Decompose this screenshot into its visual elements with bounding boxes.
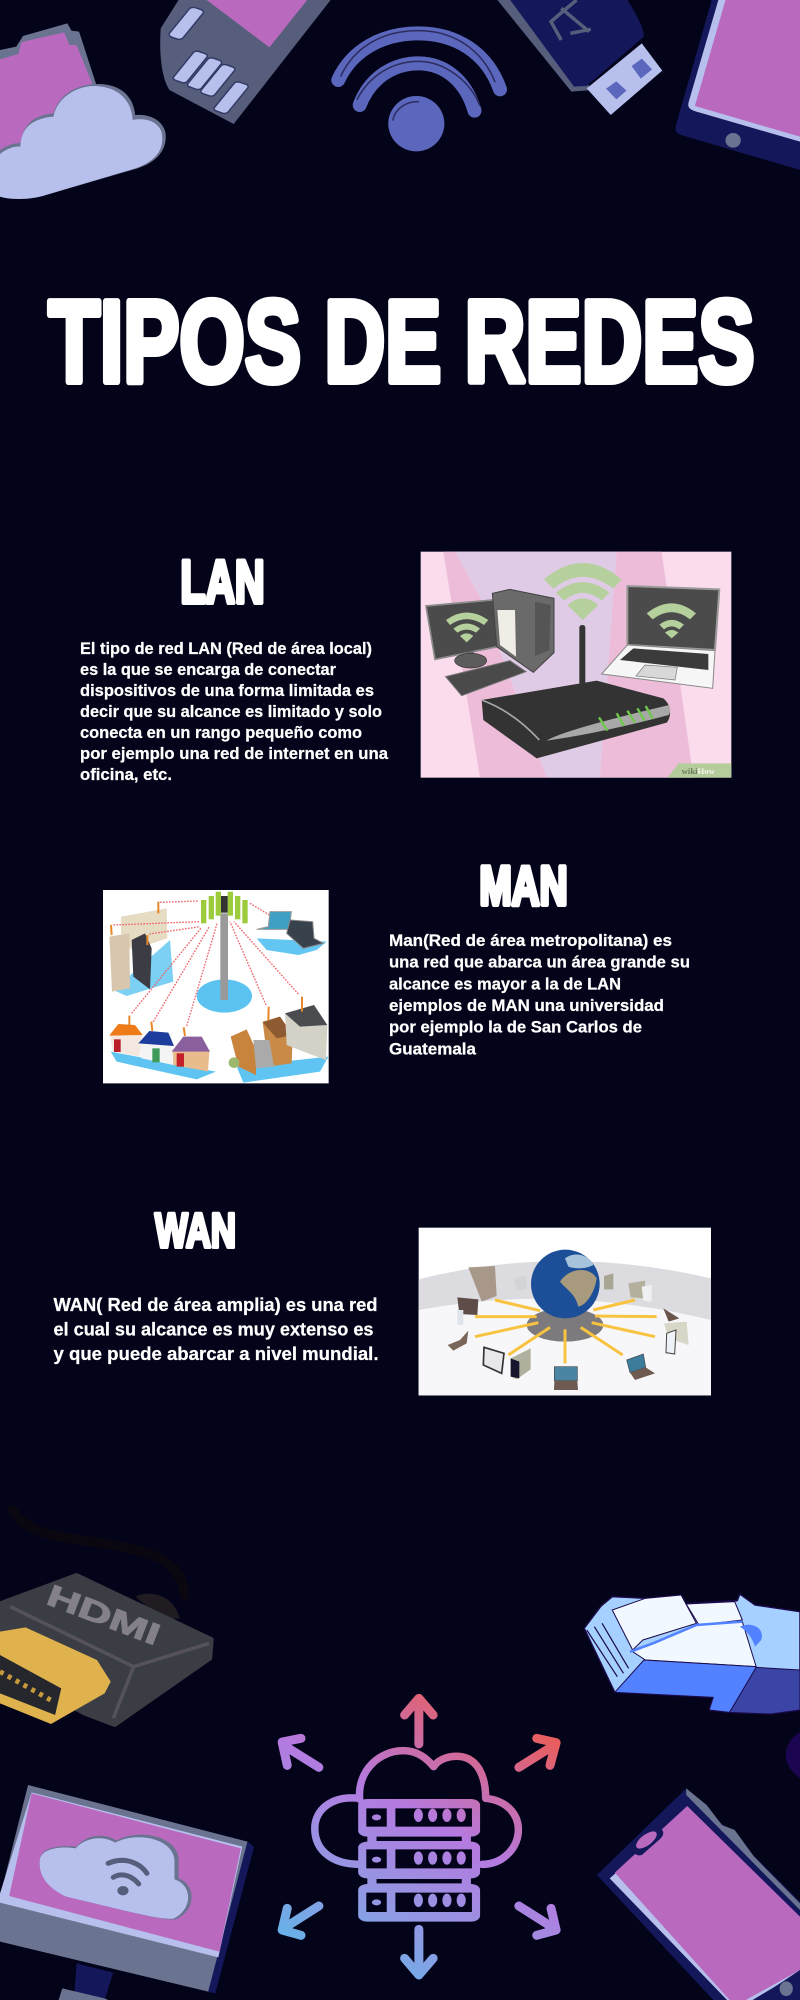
text block: LAN description: El tipo de red LAN (Red de área local) xyxy=(80,640,372,658)
heading: LAN: LAN xyxy=(180,548,264,616)
decorative purple circle xyxy=(786,1722,800,1788)
text block: MAN description: alcance es mayor a la de LAN xyxy=(389,974,621,993)
text block: LAN description: oficina, etc. xyxy=(80,766,172,784)
image: LAN router with computers: wikiHow xyxy=(682,766,716,776)
icon: wifi signal xyxy=(338,31,500,151)
panel: LAN xyxy=(80,548,731,784)
heading: WAN: WAN xyxy=(155,1205,236,1258)
icon: monitor with cloud xyxy=(0,1785,254,2000)
text block: LAN description: por ejemplo una red de internet en una xyxy=(80,745,389,763)
text block: MAN description: Guatemala xyxy=(389,1039,477,1058)
panel: WAN xyxy=(54,1205,711,1395)
icon: tablet phone xyxy=(597,1788,800,2000)
image: MAN antenna network xyxy=(103,890,329,1083)
arrows xyxy=(282,1698,556,1975)
panel: MAN xyxy=(103,854,690,1083)
text block: LAN description: conecta en un rango pequeño como xyxy=(80,724,362,742)
text block: MAN description: Man(Red de área metropolitana) es xyxy=(389,931,672,950)
icon: memory card xyxy=(160,0,331,124)
icon: HDMI connector: HDMI xyxy=(42,1579,164,1652)
text block: WAN description: el cual su alcance es muy extenso es xyxy=(54,1318,374,1340)
text block: MAN description xyxy=(389,931,690,1058)
text block: LAN description: dispositivos de una forma limitada es xyxy=(80,682,374,700)
icon: HDMI connector xyxy=(0,1510,212,1725)
icon: folder with cloud xyxy=(0,23,166,199)
text block: LAN description xyxy=(80,640,389,784)
text block: WAN description xyxy=(54,1294,378,1364)
icon: usb drive xyxy=(497,0,662,115)
text block: MAN description: una red que abarca un área grande su xyxy=(389,953,690,972)
text block: WAN description: WAN( Red de área amplia) es una red xyxy=(54,1294,378,1315)
text block: LAN description: decir que su alcance es limitado y solo xyxy=(80,703,382,721)
icon: smartphone xyxy=(675,0,800,170)
text block: MAN description: ejemplos de MAN una universidad xyxy=(389,996,664,1015)
icon: cloud server with arrows xyxy=(282,1698,556,1975)
text block: WAN description: y que puede abarcar a nivel mundial. xyxy=(54,1343,378,1364)
image: WAN globe network xyxy=(419,1228,711,1395)
icon: network plug xyxy=(584,1594,800,1714)
cloud outline xyxy=(315,1751,518,1864)
bottom decorative icons xyxy=(0,1510,800,2000)
heading: MAN: MAN xyxy=(480,854,568,916)
server stack xyxy=(358,1799,480,1922)
text block: LAN description: es la que se encarga de conectar xyxy=(80,661,337,679)
image: LAN router with computers xyxy=(421,552,731,778)
text block: MAN description: por ejemplo la de San Carlos de xyxy=(389,1018,642,1037)
top decorative icons xyxy=(0,0,800,199)
